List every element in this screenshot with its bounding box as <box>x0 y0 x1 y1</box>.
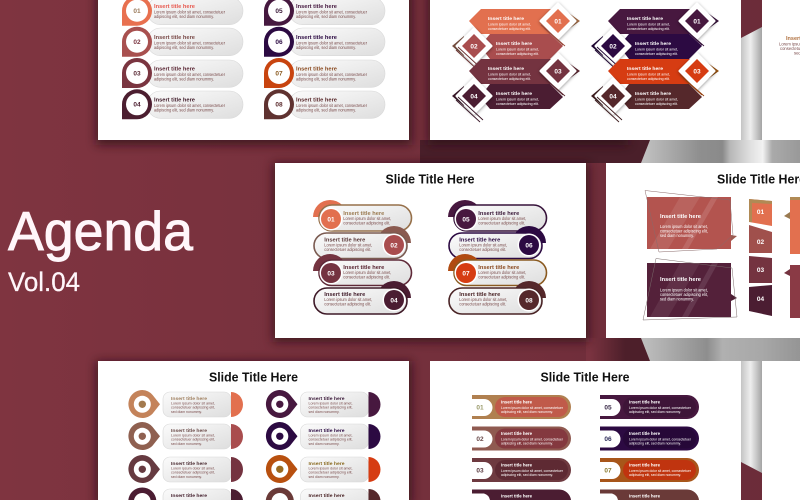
arrow 05 <box>608 4 719 46</box>
bar 05: 05 <box>604 404 612 412</box>
item 06: Lorem ipsum dolor sit amet, consectetuer <box>296 40 368 46</box>
arrow 05: 01 <box>693 18 701 25</box>
panel shadows <box>96 0 628 500</box>
capsule 07: Lorem ipsum dolor sit amet, <box>478 270 526 275</box>
droplet 05: sed diam nonummy. <box>308 410 340 414</box>
droplet 03 <box>128 455 243 483</box>
bar 02 <box>472 426 571 450</box>
item 04: Insert title here <box>154 98 195 104</box>
item 02: Lorem ipsum dolor sit amet, consectetuer <box>154 40 226 46</box>
slide title: Slide Title Here <box>209 370 298 384</box>
item 05 <box>264 0 385 26</box>
item 03: 03 <box>133 70 141 77</box>
capsule 07: Insert title here <box>478 265 519 271</box>
capsule 08: consectetuer adipiscing elit. <box>459 302 506 307</box>
item 02: adipiscing elit, sed diam nonummy. <box>154 45 214 50</box>
bar 04: Insert title here <box>501 494 533 498</box>
droplet 06: consectetuer adipiscing elit, <box>308 438 353 442</box>
bar 04 <box>472 489 571 500</box>
droplet 01 <box>128 390 243 418</box>
capsule 05: Lorem ipsum dolor sit amet, <box>478 216 526 221</box>
item 02: 02 <box>133 39 141 46</box>
panel: top right partial <box>762 0 800 140</box>
heading: Agenda: Agenda <box>8 200 193 262</box>
bar 01: Insert title here <box>501 400 533 404</box>
item 04 <box>122 89 243 119</box>
arrow 05: Insert title here <box>627 16 663 22</box>
bar 03: Insert title here <box>501 462 533 468</box>
capsule 01: consectetuer adipiscing elit. <box>343 220 390 226</box>
box: top: consectetuer adipiscing elit, <box>660 228 708 234</box>
capsule 08 <box>449 281 546 314</box>
bar 03: Lorem ipsum dolor sit amet, consectetuer <box>501 469 564 473</box>
bar 01 <box>472 395 571 419</box>
arrow 02: Insert title here <box>496 41 532 47</box>
arrow 07 <box>608 54 719 96</box>
bar 07 <box>600 458 699 482</box>
capsule 07: consectetuer adipiscing elit. <box>478 274 525 280</box>
droplet 06: Insert title here <box>308 428 345 433</box>
droplet 02: Lorem ipsum dolor sit amet, <box>171 434 215 438</box>
capsule 08: 08 <box>525 297 533 304</box>
item 08: adipiscing elit, sed diam nonummy. <box>296 108 356 113</box>
droplet 08: Insert title here <box>308 493 345 498</box>
droplet 01: Insert title here <box>171 396 207 401</box>
item 07 <box>264 58 385 88</box>
item 08: 08 <box>275 102 283 109</box>
tile 04 <box>749 285 772 316</box>
arrow 05: consectetuer adipiscing elit. <box>627 27 670 31</box>
droplet 05: Lorem ipsum dolor sit amet, <box>308 402 353 406</box>
box: bottom: Lorem ipsum dolor sit amet, <box>660 287 708 292</box>
item 03: Lorem ipsum dolor sit amet, consectetuer <box>154 72 226 77</box>
capsule 06: 06 <box>525 242 533 249</box>
item 01 <box>122 0 243 26</box>
arrow 03: Lorem ipsum dolor sit amet, <box>488 72 531 76</box>
bar 01: Lorem ipsum dolor sit amet, consectetuer <box>501 406 564 410</box>
arrow 04 <box>452 79 563 122</box>
bar 03 <box>472 458 571 482</box>
bar 05: Insert title here <box>629 400 661 404</box>
arrow 01: consectetuer adipiscing elit. <box>488 27 531 31</box>
tile 03 <box>749 256 772 283</box>
item 04: adipiscing elit, sed diam nonummy. <box>154 108 214 113</box>
capsule 06 <box>449 226 546 258</box>
droplet 03: sed diam nonummy. <box>171 475 202 479</box>
tile 04: 04 <box>757 296 764 303</box>
grey band upper <box>641 140 800 163</box>
capsule 06: consectetuer adipiscing elit. <box>459 247 506 252</box>
bar 07: adipiscing elit, sed diam nonummy. <box>629 473 681 477</box>
item 03: Insert title here <box>154 66 195 72</box>
arrow 02: Lorem ipsum dolor sit amet, <box>496 48 539 52</box>
droplet 01: Lorem ipsum dolor sit amet, <box>171 402 215 406</box>
box: right bottom <box>784 265 800 318</box>
item 06: adipiscing elit, sed diam nonummy. <box>296 45 356 50</box>
item 05: adipiscing elit, sed diam nonummy. <box>296 14 356 19</box>
arrow 03: consectetuer adipiscing elit. <box>488 77 531 81</box>
arrow 04: 04 <box>470 93 478 100</box>
arrow 02: 02 <box>470 43 478 50</box>
bar 06: Lorem ipsum dolor sit amet, consectetuer <box>629 438 692 442</box>
capsule 02 <box>314 226 411 258</box>
item 03: adipiscing elit, sed diam nonummy. <box>154 76 214 82</box>
capsule 01: Insert title here <box>343 211 384 217</box>
capsule 02: 02 <box>390 242 398 249</box>
bar 03: 03 <box>476 468 484 474</box>
arrow 02: consectetuer adipiscing elit. <box>496 52 539 56</box>
droplet 08 <box>266 487 380 500</box>
panel: top left pins <box>98 0 409 140</box>
item 08 <box>264 89 385 119</box>
bar 05: Lorem ipsum dolor sit amet, consectetuer <box>629 406 692 410</box>
item 06 <box>264 27 385 57</box>
capsule 05 <box>448 200 546 231</box>
capsule 01: 01 <box>327 216 335 223</box>
bar 07: Lorem ipsum dolor sit amet, consectetuer <box>629 469 692 473</box>
bar 02: adipiscing elit, sed diam nonummy. <box>501 442 553 446</box>
droplet 03: Lorem ipsum dolor sit amet, <box>171 466 215 470</box>
item 08: Insert title here <box>296 98 337 104</box>
arrow 07: Insert title here <box>627 66 663 72</box>
item 05: Insert title here <box>296 4 337 10</box>
panel: center capsules <box>275 163 586 338</box>
capsule 03 <box>313 254 412 286</box>
capsule 05: 05 <box>462 216 470 223</box>
arrow 01: 01 <box>554 18 562 25</box>
bar 07: 07 <box>604 468 612 474</box>
capsule 04: Insert title here <box>324 292 365 298</box>
bar 07: Insert title here <box>629 462 661 468</box>
capsule 08: Lorem ipsum dolor sit amet, <box>459 297 507 302</box>
capsule 03: consectetuer adipiscing elit. <box>343 274 390 280</box>
arrow 06: Lorem ipsum dolor sit amet, <box>635 48 678 52</box>
droplet 02: Insert title here <box>171 428 207 433</box>
arrow 07: consectetuer adipiscing elit. <box>627 77 670 81</box>
arrow 06 <box>591 29 702 72</box>
droplet 06: sed diam nonummy. <box>308 442 340 446</box>
bar 06: 06 <box>604 436 612 443</box>
panel: right speech boxes <box>606 163 800 338</box>
arrow 06: 02 <box>609 43 617 50</box>
capsule 02: Insert title here <box>324 237 365 243</box>
item 02 <box>122 27 243 57</box>
arrow 06: consectetuer adipiscing elit. <box>635 52 678 56</box>
capsule 03: Lorem ipsum dolor sit amet, <box>343 270 391 275</box>
panel: top middle arrows <box>430 0 741 140</box>
arrow 08 <box>591 79 702 122</box>
droplet 04 <box>128 487 243 500</box>
bar 08 <box>600 489 699 500</box>
item 04: Lorem ipsum dolor sit amet, consectetuer <box>154 103 226 108</box>
arrow 02 <box>452 29 563 72</box>
bar 02: Lorem ipsum dolor sit amet, consectetuer <box>501 438 564 442</box>
item 06: 06 <box>275 39 283 46</box>
tile 01 <box>749 199 772 226</box>
panel: bottom right partial <box>762 361 800 500</box>
item 01: Insert title here <box>154 4 195 10</box>
subheading: Vol.04: Vol.04 <box>8 267 80 297</box>
box: bottom: consectetuer adipiscing elit, <box>660 292 708 297</box>
droplet 05 <box>266 390 380 418</box>
droplet 02 <box>128 422 243 450</box>
dark band upper <box>420 140 650 163</box>
tile 02 <box>749 225 772 253</box>
capsule 04 <box>314 281 411 314</box>
capsule 08: Insert title here <box>459 292 500 298</box>
bar 01: 01 <box>476 404 484 412</box>
item 04: 04 <box>133 102 141 109</box>
panel: bottom middle bars <box>430 361 741 500</box>
droplet 03: Insert title here <box>171 461 207 466</box>
arrow 07: Lorem ipsum dolor sit amet, <box>627 72 670 76</box>
capsule 02: consectetuer adipiscing elit. <box>324 247 371 252</box>
item 06: Insert title here <box>296 35 337 41</box>
item 07: Insert title here <box>296 66 337 72</box>
droplet 03: consectetuer adipiscing elit, <box>171 471 215 475</box>
bar 01: adipiscing elit, sed diam nonummy. <box>501 410 553 414</box>
grey band lower <box>641 338 800 361</box>
droplet 04: Insert title here <box>171 493 207 498</box>
item 07: Lorem ipsum dolor sit amet, consectetuer <box>296 72 368 77</box>
slide title: Slide Title Here <box>386 172 475 186</box>
capsule 01: Lorem ipsum dolor sit amet, <box>343 216 391 221</box>
droplet 07: Lorem ipsum dolor sit amet, <box>308 466 353 470</box>
arrow 01: Lorem ipsum dolor sit amet, <box>488 22 531 26</box>
droplet 07: consectetuer adipiscing elit, <box>308 471 353 475</box>
panel: bottom left droplets <box>98 361 409 500</box>
capsule 04: consectetuer adipiscing elit. <box>324 302 371 307</box>
bar 05: adipiscing elit, sed diam nonummy. <box>629 410 681 414</box>
arrow 04: Lorem ipsum dolor sit amet, <box>496 98 539 102</box>
bar 08: Insert title here <box>629 494 661 498</box>
droplet 07: Insert title here <box>308 461 345 466</box>
droplet 07: sed diam nonummy. <box>308 475 340 479</box>
item 05: 05 <box>275 8 283 15</box>
capsule 03: 03 <box>327 270 335 277</box>
item 01: 01 <box>133 8 141 15</box>
box: bottom <box>643 258 737 320</box>
arrow 08: Lorem ipsum dolor sit amet, <box>635 98 678 102</box>
droplet 05: Insert title here <box>308 396 345 401</box>
capsule 05: Insert title here <box>478 211 519 217</box>
arrow 05: Lorem ipsum dolor sit amet, <box>627 22 670 26</box>
droplet 05: consectetuer adipiscing elit, <box>308 406 353 410</box>
item 07: adipiscing elit, sed diam nonummy. <box>296 76 356 82</box>
droplet 02: consectetuer adipiscing elit, <box>171 438 215 442</box>
capsule 07 <box>448 254 546 286</box>
arrow 06: Insert title here <box>635 41 671 47</box>
item 08: Lorem ipsum dolor sit amet, consectetuer <box>296 103 368 108</box>
box: top: sed diam nonummy. <box>660 233 694 238</box>
capsule 07: 07 <box>462 270 470 277</box>
grey vertical strip upper <box>741 27 762 140</box>
capsule 04: 04 <box>390 297 398 304</box>
bar 03: adipiscing elit, sed diam nonummy. <box>501 473 553 477</box>
dark band lower <box>586 338 650 361</box>
arrow 03: 03 <box>554 68 562 75</box>
capsule 03: Insert title here <box>343 265 384 271</box>
box: bottom: sed diam nonummy. <box>660 296 694 302</box>
arrow 04: consectetuer adipiscing elit. <box>496 102 539 106</box>
item 01: Lorem ipsum dolor sit amet, consectetuer <box>154 10 226 14</box>
tile 01: 01 <box>757 209 764 216</box>
box: top <box>645 190 737 252</box>
partial text block <box>779 36 800 56</box>
item 07: 07 <box>275 70 283 77</box>
droplet 06 <box>266 422 380 450</box>
capsule 01 <box>313 200 412 231</box>
arrow 07: 03 <box>693 68 701 75</box>
arrow 03 <box>469 54 580 96</box>
bar 05 <box>600 395 699 419</box>
droplet 06: Lorem ipsum dolor sit amet, <box>308 434 353 438</box>
bar 06: Insert title here <box>629 431 661 436</box>
item 05: Lorem ipsum dolor sit amet, consectetuer <box>296 10 368 14</box>
arrow 04: Insert title here <box>496 91 532 97</box>
droplet 02: sed diam nonummy. <box>171 442 202 446</box>
arrow 03: Insert title here <box>488 66 524 72</box>
box: right top <box>784 197 800 254</box>
arrow 08: consectetuer adipiscing elit. <box>635 102 678 106</box>
capsule 06: Lorem ipsum dolor sit amet, <box>459 242 507 247</box>
box: top: Insert title here <box>660 214 701 220</box>
bar 06: adipiscing elit, sed diam nonummy. <box>629 442 681 446</box>
item 01: adipiscing elit, sed diam nonummy. <box>154 14 214 19</box>
capsule 04: Lorem ipsum dolor sit amet, <box>324 297 372 302</box>
droplet 01: sed diam nonummy. <box>171 410 202 414</box>
tile 02: 02 <box>757 239 764 246</box>
item 03 <box>122 58 243 88</box>
capsule 05: consectetuer adipiscing elit. <box>478 220 525 226</box>
box: bottom: Insert title here <box>660 277 701 283</box>
bar 06 <box>600 426 699 450</box>
arrow 01 <box>469 4 580 46</box>
arrow 08: 04 <box>609 93 617 100</box>
droplet 01: consectetuer adipiscing elit, <box>171 406 215 410</box>
arrow 08: Insert title here <box>635 91 671 97</box>
item 02: Insert title here <box>154 35 195 41</box>
arrow 01: Insert title here <box>488 16 524 22</box>
box: top: Lorem ipsum dolor sit amet, <box>660 224 708 229</box>
grey vertical strip lower <box>741 361 762 473</box>
tile 03: 03 <box>757 267 764 274</box>
bar 02: Insert title here <box>501 431 533 436</box>
capsule 06: Insert title here <box>459 237 500 243</box>
slide title: Slide Title Here <box>540 370 630 384</box>
droplet 07 <box>266 455 380 483</box>
capsule 02: Lorem ipsum dolor sit amet, <box>324 242 372 247</box>
bar 02: 02 <box>476 436 484 443</box>
